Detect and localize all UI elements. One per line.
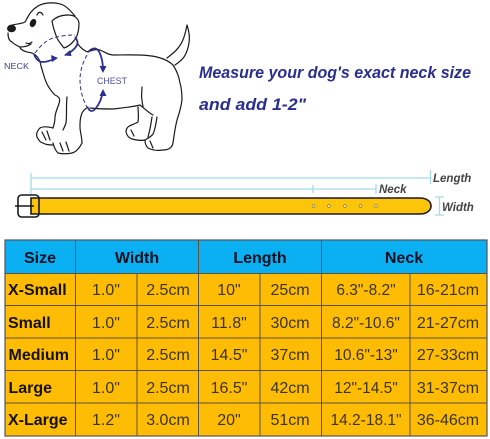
- row: x-large: 51cm: [270, 412, 310, 429]
- header row background: [5, 240, 487, 273]
- collar diagram: [15, 170, 474, 217]
- row: small: 1.0": [92, 315, 120, 332]
- table headers: Length: [233, 250, 287, 267]
- dog illustration: [4, 3, 189, 154]
- row: large: 1.0": [92, 380, 120, 397]
- row: x-small: 16-21cm: [417, 282, 479, 299]
- table headers: Width: [115, 250, 159, 267]
- table headers: [24, 250, 423, 267]
- row: small: 2.5cm: [146, 315, 190, 332]
- row: medium: 1.0": [92, 347, 120, 364]
- row: small: 30cm: [270, 315, 310, 332]
- icon: dog outline: [8, 3, 189, 154]
- instruction text: [199, 64, 471, 114]
- neck dimension line: [31, 184, 376, 194]
- row: x-small: 2.5cm: [146, 282, 190, 299]
- size labels: Small: [8, 315, 51, 332]
- collar strap: [31, 198, 431, 214]
- collar buckle: [15, 195, 39, 217]
- label: width: Width: [442, 202, 474, 214]
- table grid: [5, 240, 487, 436]
- row: x-large: 3.0cm: [146, 412, 190, 429]
- body rows background: [5, 273, 487, 436]
- row: small: 8.2"-10.6": [332, 315, 400, 332]
- size table: [5, 240, 487, 436]
- row: large: 16.5": [211, 380, 247, 397]
- row: large: 42cm: [270, 380, 310, 397]
- row: medium: 37cm: [270, 347, 310, 364]
- size labels: Large: [8, 380, 52, 397]
- row: medium: 10.6"-13": [334, 347, 398, 364]
- row: x-small: 1.0": [92, 282, 120, 299]
- size labels: [8, 282, 69, 429]
- icon: measuring loops: [34, 35, 103, 111]
- row: x-large: 1.2": [92, 412, 120, 429]
- row: x-small: 25cm: [270, 282, 310, 299]
- length dimension line: [31, 170, 430, 196]
- table values: [92, 282, 479, 429]
- size labels: X-Large: [8, 412, 68, 429]
- row: large: 31-37cm: [417, 380, 479, 397]
- row: x-small: 6.3"-8.2": [336, 282, 396, 299]
- row: medium: 2.5cm: [146, 347, 190, 364]
- row: medium: [92, 347, 479, 364]
- label: chest: CHEST: [97, 76, 127, 86]
- row: small: 21-27cm: [417, 315, 479, 332]
- collar holes: [312, 205, 377, 207]
- row: small: 11.8": [211, 315, 247, 332]
- row: large: 12"-14.5": [334, 380, 398, 397]
- icon: measuring arrowheads: [51, 50, 106, 96]
- row: large: 2.5cm: [146, 380, 190, 397]
- row: x-large: 14.2-18.1": [330, 412, 402, 429]
- icon: dog nose and eye: [7, 18, 38, 32]
- row: x-large: [92, 412, 479, 429]
- row: small: [92, 315, 479, 332]
- row: x-small: [92, 282, 479, 299]
- row: x-large: 36-46cm: [417, 412, 479, 429]
- size labels: Medium: [8, 347, 69, 364]
- label: length: Length: [433, 173, 471, 185]
- size labels: X-Small: [8, 282, 67, 299]
- table headers: Neck: [385, 250, 423, 267]
- row: x-large: 20": [217, 412, 241, 429]
- row: medium: 27-33cm: [417, 347, 479, 364]
- row: medium: 14.5": [211, 347, 247, 364]
- instruction text: Measure your dog's exact neck size: [199, 64, 471, 82]
- label: neck: Neck: [379, 184, 407, 196]
- row: x-small: 10": [217, 282, 241, 299]
- table headers: Size: [24, 250, 56, 267]
- row: large: [92, 380, 479, 397]
- label: neck: NECK: [4, 61, 29, 71]
- instruction text: and add 1-2": [199, 96, 306, 114]
- width dimension line: [435, 197, 444, 215]
